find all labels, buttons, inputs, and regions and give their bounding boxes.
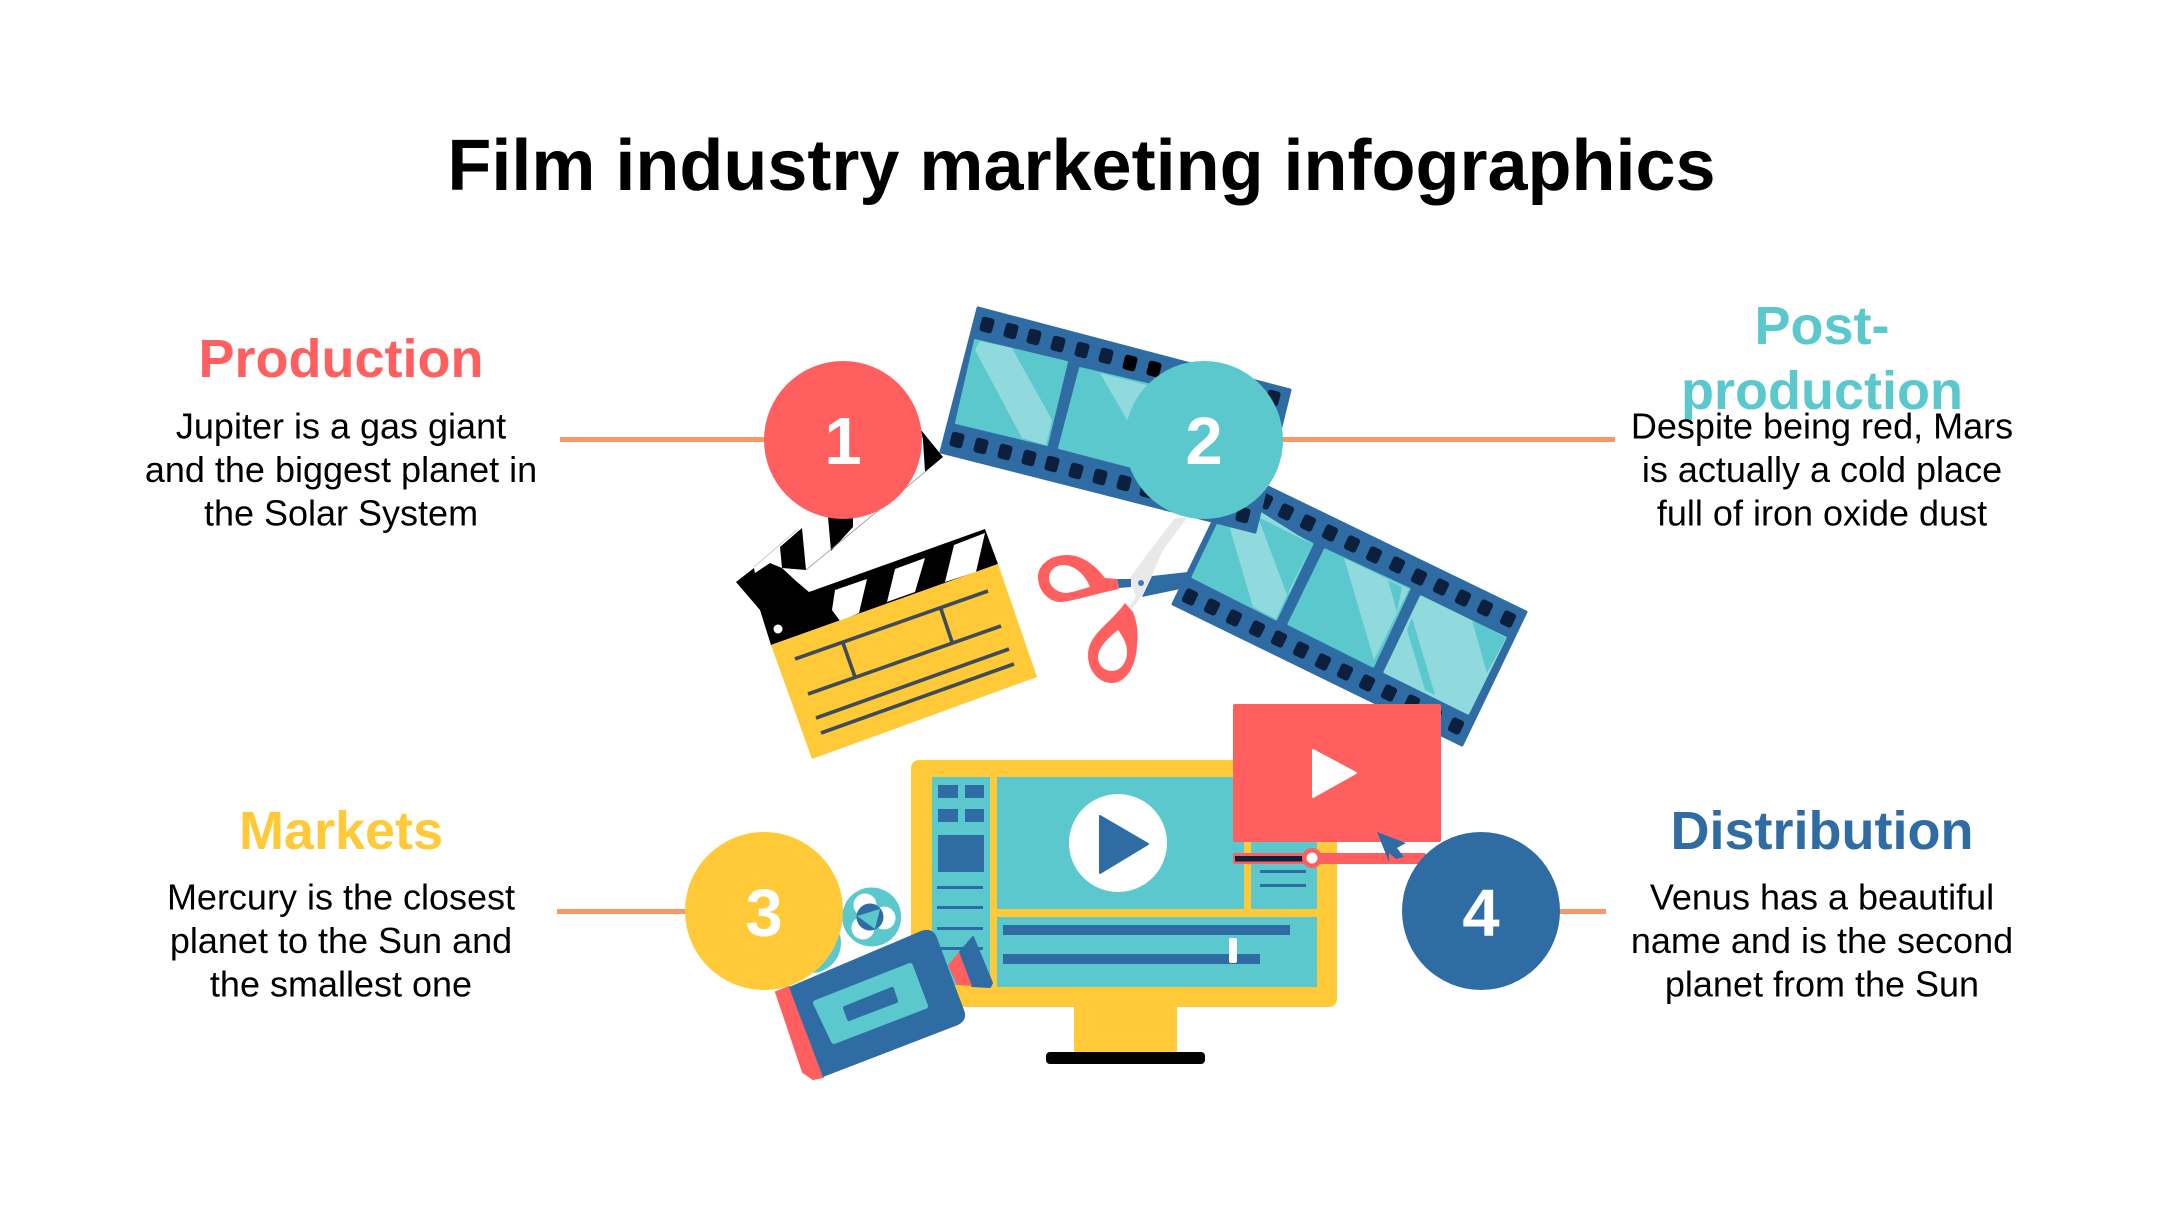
- icon: monitor: [911, 760, 1337, 1064]
- circle 1: 1: [824, 404, 862, 479]
- text block: markets: Markets: [239, 801, 443, 861]
- circle 4: 4: [1462, 876, 1500, 951]
- circle 3: 3: [745, 876, 783, 951]
- text block: post-production: [1631, 296, 2013, 534]
- text block: post-production: Despite being red, Mars: [1631, 406, 2013, 446]
- icon: film reels: [781, 888, 901, 973]
- connector line: markets: [557, 909, 692, 914]
- text block: markets: Mercury is the closest: [167, 876, 515, 918]
- icon: film strip upper: [941, 308, 1290, 532]
- text block: post-production: is actually a cold place: [1642, 449, 2002, 490]
- circle 4: [1402, 832, 1560, 990]
- connector line: distribution: [1552, 909, 1606, 914]
- text block: production: the Solar System: [204, 492, 478, 534]
- circle 3: [685, 832, 843, 990]
- text block: post-production: production: [1681, 361, 1963, 421]
- text block: production: [145, 329, 537, 534]
- circle 1: [764, 361, 922, 519]
- text block: distribution: planet from the Sun: [1665, 964, 1979, 1004]
- text block: production: Jupiter is a gas giant: [176, 406, 506, 446]
- text block: distribution: Venus has a beautiful: [1650, 876, 1994, 918]
- text block: distribution: Distribution: [1671, 801, 1973, 861]
- text block: production: Production: [199, 329, 483, 389]
- circle 2: 2: [1185, 404, 1223, 479]
- text block: post-production: Post-: [1754, 296, 1890, 356]
- icon: scissors: [1038, 518, 1190, 683]
- text block: production: and the biggest planet in: [145, 449, 537, 490]
- text block: markets: [167, 801, 515, 1004]
- text block: distribution: name and is the second: [1631, 920, 2013, 961]
- title: Film industry marketing infographics: [447, 126, 1716, 206]
- circle 2: [1125, 361, 1283, 519]
- text block: post-production: full of iron oxide dust: [1657, 492, 1987, 534]
- icon: film strip lower: [1173, 472, 1526, 745]
- text block: markets: the smallest one: [210, 964, 472, 1004]
- icon: video camera: [776, 930, 992, 1079]
- icon: video player window: [1233, 704, 1441, 868]
- connector line: post-production: [1278, 437, 1615, 442]
- icon: clapperboard: [736, 430, 1037, 759]
- text block: markets: planet to the Sun and: [170, 920, 512, 961]
- text block: distribution: [1631, 801, 2013, 1004]
- connector line: production: [560, 437, 770, 442]
